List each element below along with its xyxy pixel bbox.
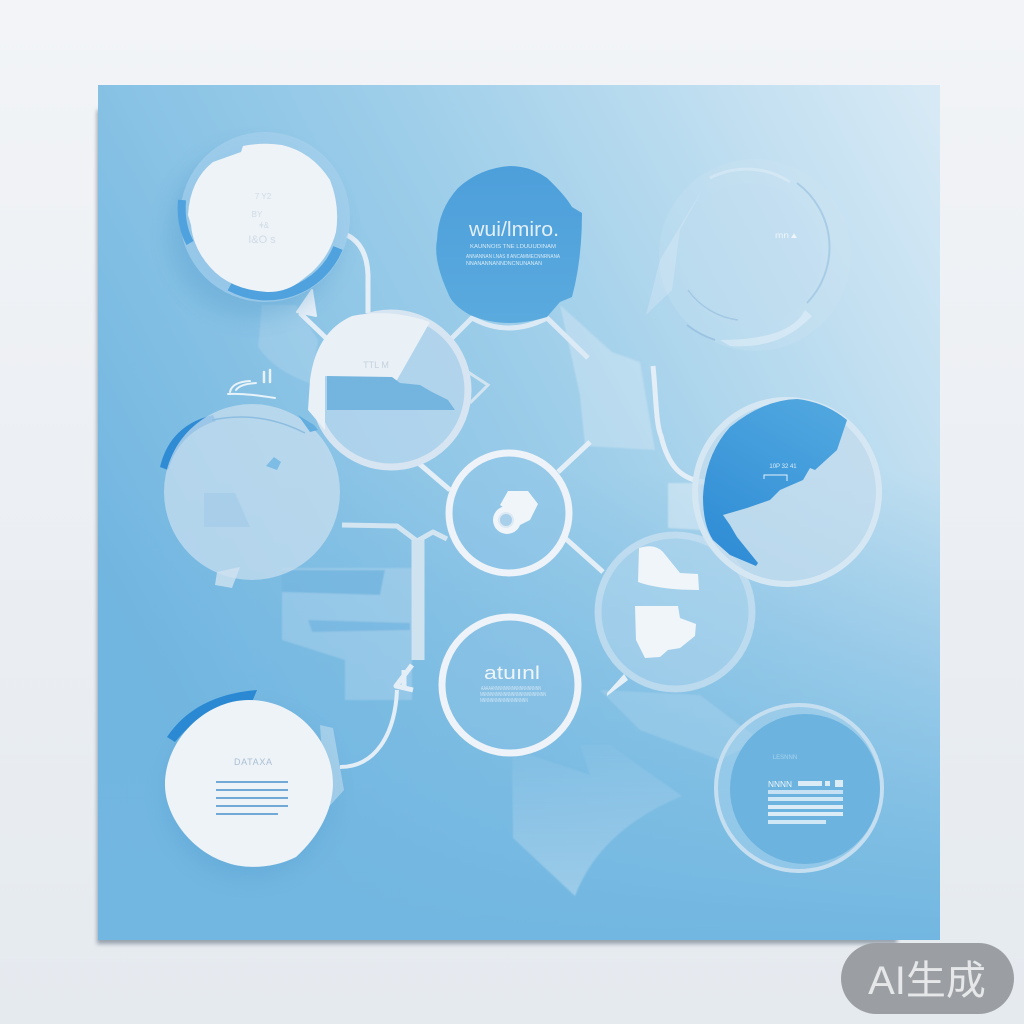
small label text: 7 Y2 bbox=[255, 192, 272, 201]
panel: right-centre lens with icons bbox=[595, 532, 755, 696]
blob body text bbox=[466, 244, 561, 267]
small label text: BY bbox=[252, 210, 263, 219]
small label text: ǂ& bbox=[259, 221, 270, 230]
small label text: I&O s bbox=[248, 234, 276, 246]
panel: top-right glass circle bbox=[646, 159, 851, 351]
leaf label: 10P 32 41 bbox=[769, 464, 797, 470]
ring heading: atuınl bbox=[484, 663, 540, 683]
panel: top-left white circle bbox=[169, 132, 350, 318]
text bars bbox=[768, 780, 843, 824]
panel: lower-centre ring with text bbox=[442, 617, 578, 753]
connector lines bbox=[297, 235, 714, 767]
card text lines bbox=[216, 781, 288, 815]
panel: bottom-left white circle bbox=[165, 690, 344, 878]
icon: small sketch above circle bbox=[228, 370, 275, 398]
badge: AI generated: AI生成 bbox=[868, 959, 986, 1003]
panel: top-centre blue blob bbox=[436, 166, 582, 323]
blob body text: ANNANNAN LNAS 8 ANCAMMECNNRNANA bbox=[466, 254, 561, 260]
lens label: TTL M bbox=[363, 360, 389, 370]
ring body text: NNNNNNNNNNNNNNNNNN bbox=[480, 698, 528, 704]
blob heading: wui/lmiro. bbox=[468, 219, 559, 241]
icon: lower white shape bbox=[635, 606, 696, 658]
panel: centre ring with icon bbox=[449, 453, 569, 573]
blob body text: KAUNNOIS TNE LDUUUDINAM bbox=[470, 244, 556, 250]
blob body text: NNANANNANNDNCNUNANAN bbox=[466, 261, 542, 267]
ring body text: NNNNNNNNNNNNNNNNNNNNNNNNN bbox=[480, 692, 546, 698]
panel: left glass circle bbox=[160, 370, 340, 588]
ring body text bbox=[480, 686, 546, 704]
text bars: NNNN bbox=[768, 780, 792, 789]
badge: AI generated bbox=[841, 943, 1014, 1014]
icon: centre glyph bbox=[493, 491, 538, 534]
tiny glass label: mn▲ bbox=[775, 231, 799, 240]
small label text bbox=[248, 192, 276, 246]
card title: DATAXA bbox=[234, 757, 272, 767]
icon: upper white shape bbox=[638, 546, 699, 590]
panel: right blue-leaf circle bbox=[692, 397, 882, 587]
main blue panel bbox=[98, 85, 940, 940]
panel shadow bbox=[97, 110, 897, 944]
ring body text: AAAAANNNNNNNNNNNNNNNNNN bbox=[481, 686, 541, 692]
panel: bottom-right ring with text bars bbox=[714, 703, 884, 873]
translucent background shapes bbox=[258, 305, 760, 896]
panel: upper-centre lens circle bbox=[308, 310, 488, 470]
ring label: LESNNN bbox=[773, 755, 797, 761]
